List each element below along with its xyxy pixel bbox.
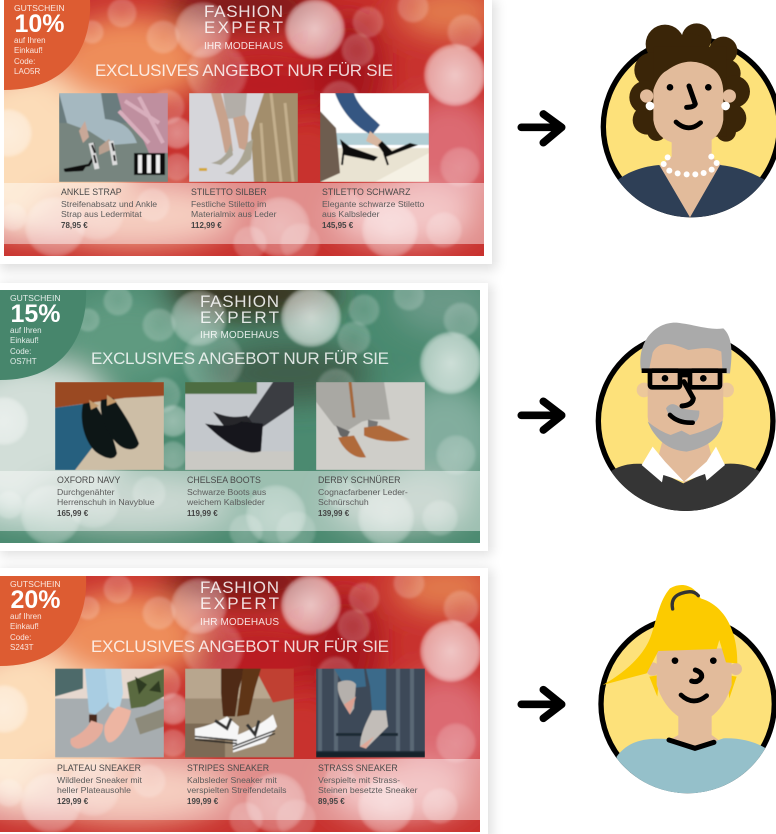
badge: Gutschein 15%: Einkauf! [10, 336, 39, 345]
products text: CHELSEA BOOTS [187, 475, 261, 485]
badge: Gutschein 15%: 15% [10, 300, 61, 328]
products text: heller Plateausohle [57, 785, 131, 795]
products text: OXFORD NAVY [57, 475, 121, 485]
avatar: woman with curly dark hair [603, 23, 776, 223]
brand logo: IHR MODEHAUS [204, 41, 283, 52]
products text: STRASS SNEAKER [318, 763, 398, 773]
products text: STRIPES SNEAKER [187, 763, 269, 773]
photo: derby shoes [316, 382, 425, 470]
products text: Steinen besetzte Sneaker [318, 785, 418, 795]
badge: Gutschein 15%: auf Ihren [10, 326, 42, 335]
products text [57, 475, 408, 518]
heading: EXCLUSIVES ANGEBOT NUR FÜR SIE [91, 349, 389, 368]
badge: Gutschein 10%: LAO5R [14, 67, 40, 76]
brand logo: EXPERT [204, 18, 283, 37]
badge: Gutschein 20% [0, 576, 86, 666]
products text: Verspielte mit Strass- [318, 775, 400, 785]
products text: DERBY SCHNÜRER [318, 475, 400, 485]
products text: ANKLE STRAP [61, 187, 122, 197]
badge: Gutschein 15%: Code: [10, 347, 31, 356]
badge: Gutschein 20%: Code: [10, 633, 31, 642]
badge: Gutschein 15%: OS7HT [10, 357, 37, 366]
brand logo: EXPERT [200, 594, 279, 613]
badge: Gutschein 20%: GUTSCHEIN [10, 579, 61, 589]
products text: weichem Kalbsleder [186, 497, 265, 507]
products text: Festliche Stiletto im [191, 199, 266, 209]
arrow 2 [521, 401, 562, 430]
badge: Gutschein 15%: GUTSCHEIN [10, 293, 61, 303]
photo: strass sneaker [316, 668, 425, 758]
photo: stripes sneaker [185, 668, 294, 758]
badge: Gutschein 10%: 10% [14, 10, 65, 38]
products text: 199,99 € [187, 797, 219, 806]
badge: Gutschein 20%: auf Ihren [10, 612, 42, 621]
avatar: young woman with blond ponytail [601, 585, 774, 795]
brand logo: IHR MODEHAUS [200, 617, 279, 628]
panel: email 15 percent offer [0, 290, 480, 543]
photo: plateau sneaker [55, 668, 164, 758]
heading: EXCLUSIVES ANGEBOT NUR FÜR SIE [91, 637, 389, 656]
badge: Gutschein 15% [0, 288, 86, 380]
badge: Gutschein 10%: auf Ihren [14, 36, 46, 45]
badge: Gutschein 10%: Code: [14, 57, 35, 66]
brand logo: EXPERT [200, 308, 279, 327]
badge: Gutschein 20%: Einkauf! [10, 622, 39, 631]
products text: Strap aus Ledermitat [61, 209, 142, 219]
photo: stiletto black [320, 93, 429, 182]
products text: Herrenschuh in Navyblue [57, 497, 155, 507]
badge: Gutschein 10%: Einkauf! [14, 46, 43, 55]
products text: Schnürschuh [318, 497, 369, 507]
brand logo [204, 6, 283, 49]
products text: Streifenabsatz und Ankle [61, 199, 157, 209]
badge: Gutschein 10% [4, 0, 90, 90]
products text: 139,99 € [318, 509, 350, 518]
photo: oxford navy [55, 382, 164, 470]
brand logo: FASHION [204, 2, 283, 21]
panel: email 10 percent offer [0, 0, 499, 263]
products text: STILETTO SCHWARZ [322, 187, 411, 197]
avatar: older man with glasses [598, 323, 773, 517]
products text: STILETTO SILBER [191, 187, 267, 197]
photo: chelsea boots [185, 382, 294, 470]
heading: EXCLUSIVES ANGEBOT NUR FÜR SIE [95, 61, 393, 80]
products text: 165,99 € [57, 509, 89, 518]
badge: Gutschein 10%: GUTSCHEIN [14, 3, 65, 13]
brand logo: FASHION [200, 578, 279, 597]
brand logo: IHR MODEHAUS [200, 330, 279, 341]
brand logo [200, 296, 279, 338]
products text [57, 763, 418, 806]
products text: 129,99 € [57, 797, 89, 806]
products text: Schwarze Boots aus [187, 487, 267, 497]
products text: 78,95 € [61, 221, 88, 230]
products text [61, 187, 425, 230]
arrow 1 [521, 114, 562, 143]
products text: Cognacfarbener Leder- [318, 487, 408, 497]
products text: Materialmix aus Leder [191, 209, 277, 219]
products text: verspielten Streifendetails [187, 785, 287, 795]
panel: email 20 percent offer [0, 560, 495, 834]
panel shadows [0, 0, 496, 834]
products text: aus Kalbsleder [322, 209, 380, 219]
brand logo: FASHION [200, 292, 279, 311]
brand logo [200, 582, 279, 625]
products text: 145,95 € [322, 221, 354, 230]
photo: ankle strap [59, 93, 168, 182]
products text: 119,99 € [187, 509, 218, 518]
badge: Gutschein 20%: S243T [10, 643, 34, 652]
products text: 89,95 € [318, 797, 345, 806]
products text: Elegante schwarze Stiletto [322, 199, 425, 209]
products text: Wildleder Sneaker mit [57, 775, 143, 785]
arrow 3 [521, 690, 562, 718]
badge: Gutschein 20%: 20% [10, 586, 61, 614]
photo: stiletto silver [189, 93, 298, 182]
products text: PLATEAU SNEAKER [57, 763, 141, 773]
products text: Durchgenähter [57, 487, 115, 497]
products text: Kalbsleder Sneaker mit [187, 775, 277, 785]
products text: 112,99 € [191, 221, 222, 230]
